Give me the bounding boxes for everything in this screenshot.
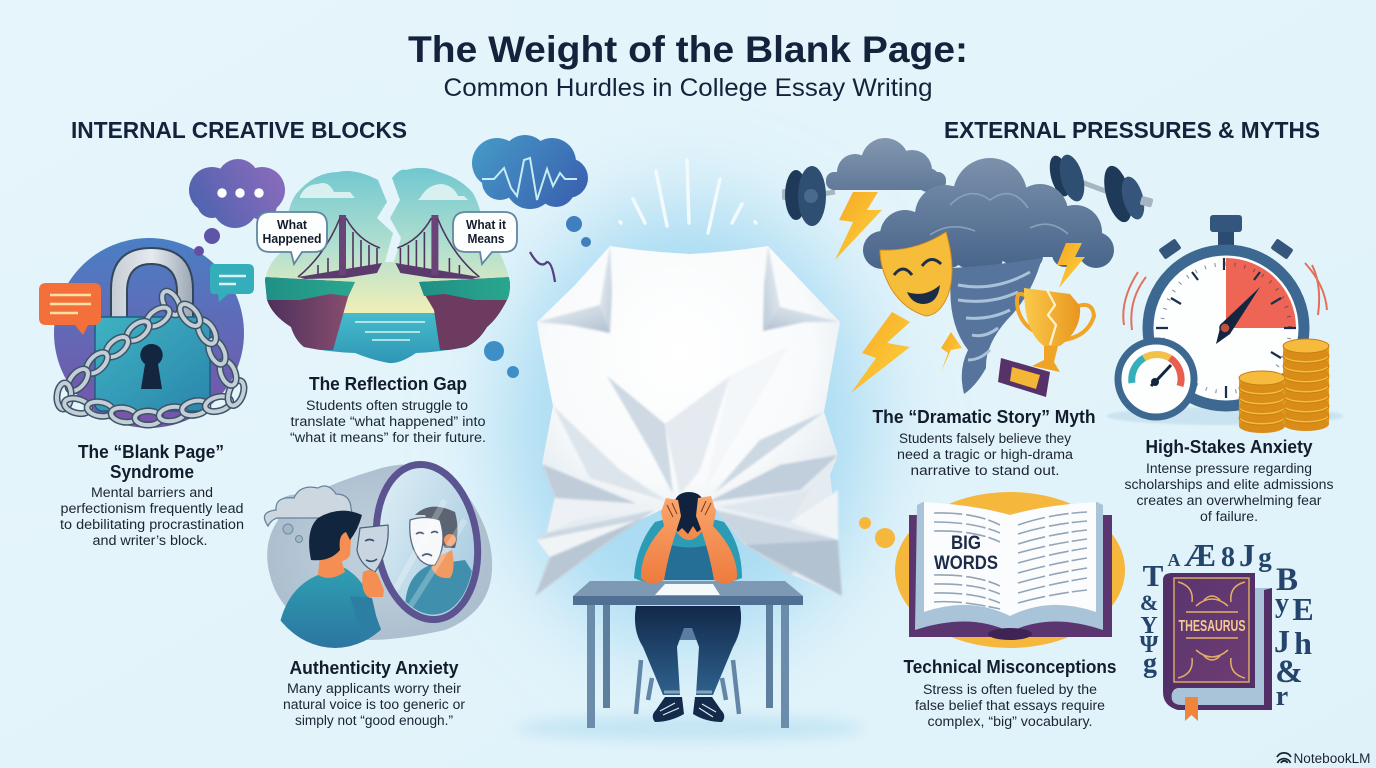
icon: thesaurus book with letters: 8 xyxy=(1221,542,1235,573)
icon: man with mask at mirror xyxy=(264,458,492,660)
icon: thesaurus book with letters: & xyxy=(1140,590,1158,615)
icon: open book with big words: BIG xyxy=(951,533,981,554)
icon: tornado xyxy=(950,258,1042,394)
body: technical misconceptions xyxy=(915,682,1105,729)
body: reflection gap: translate “what happened” into xyxy=(290,414,486,429)
body: dramatic story xyxy=(897,431,1074,478)
icon: thesaurus book with letters: h xyxy=(1294,625,1312,661)
icon: thesaurus book with letters: r xyxy=(1276,681,1288,712)
icon: chained padlock xyxy=(54,238,247,428)
central figure: student under giant blank page xyxy=(535,160,842,728)
icon: open book with big words: WORDS xyxy=(934,553,998,574)
heading: blank page: The “Blank Page” xyxy=(78,442,224,462)
chair xyxy=(636,628,739,714)
callout: what it means xyxy=(453,212,517,264)
body: high-stakes anxiety: Intense pressure regarding xyxy=(1146,461,1312,476)
body: dramatic story: narrative to stand out. xyxy=(910,463,1060,478)
panel: authenticity anxiety xyxy=(264,458,492,728)
body: high-stakes anxiety: of failure. xyxy=(1200,509,1258,524)
body: reflection gap xyxy=(290,398,486,445)
title: The Weight of the Blank Page: xyxy=(408,29,968,70)
icon: stopwatch with gauge and coins xyxy=(1107,215,1343,433)
callout: what it means: What it xyxy=(466,217,507,232)
body: dramatic story: need a tragic or high-drama xyxy=(897,447,1074,462)
icon: blue thought bubble xyxy=(472,135,591,378)
icon: thesaurus book with letters xyxy=(1140,537,1314,721)
brand: NotebookLM: NotebookLM xyxy=(1294,751,1370,766)
icon: cracked trophy xyxy=(998,288,1094,397)
icon: orange speech bubble xyxy=(39,283,101,335)
body: high-stakes anxiety: creates an overwhelming fear xyxy=(1136,493,1322,508)
panel: high-stakes anxiety xyxy=(1107,215,1343,524)
icon: teal speech bubble xyxy=(210,264,254,302)
body: reflection gap: “what it means” for their future. xyxy=(290,430,486,445)
icon: thesaurus book with letters: THESAURUS xyxy=(1178,618,1246,635)
body: dramatic story: Students falsely believe they xyxy=(899,431,1071,446)
panel: blank page syndrome xyxy=(39,159,285,548)
callout: what happened: Happened xyxy=(262,231,322,246)
icon: thesaurus book with letters: Æ xyxy=(1184,537,1216,573)
icon: comedy mask xyxy=(880,232,952,316)
icon: thesaurus book with letters: J xyxy=(1239,537,1255,573)
body: technical misconceptions: complex, “big” vocabulary. xyxy=(928,714,1092,729)
icon: thesaurus book with letters: T xyxy=(1143,558,1164,593)
callout: what it means: Means xyxy=(468,231,504,246)
body: blank page: perfectionism frequently lead xyxy=(60,501,244,516)
shoes xyxy=(653,697,724,722)
body: high-stakes anxiety: scholarships and elite admissions xyxy=(1124,477,1334,492)
icon: lightning bolts xyxy=(835,192,1085,393)
icon: purple thought bubble xyxy=(189,159,285,256)
body: authenticity anxiety xyxy=(283,681,466,728)
body: authenticity anxiety: Many applicants worry their xyxy=(287,681,462,696)
body: technical misconceptions: Stress is often fueled by the xyxy=(923,682,1097,697)
body: reflection gap: Students often struggle to xyxy=(306,398,468,413)
panel: technical misconceptions xyxy=(859,492,1314,729)
callout: what happened: What xyxy=(277,217,308,232)
subtitle: Common Hurdles in College Essay Writing xyxy=(444,74,932,102)
body: blank page xyxy=(60,485,244,548)
body: high-stakes anxiety xyxy=(1124,461,1334,524)
heading: dramatic story: The “Dramatic Story” Myth xyxy=(872,407,1096,427)
student torso and arms xyxy=(634,492,742,584)
icon: thesaurus book with letters: Y xyxy=(1140,613,1158,639)
heading: authenticity anxiety: Authenticity Anxiety xyxy=(290,658,458,678)
title xyxy=(408,29,968,102)
desk xyxy=(573,581,803,728)
radiating marks xyxy=(620,160,756,233)
callout: what happened xyxy=(257,212,327,264)
icon: thesaurus book with letters: E xyxy=(1292,591,1314,627)
heading: technical misconceptions: Technical Misconceptions xyxy=(904,657,1116,677)
heading: high-stakes anxiety: High-Stakes Anxiety xyxy=(1146,437,1312,457)
body: technical misconceptions: false belief that essays require xyxy=(915,698,1105,713)
heading: internal creative blocks: INTERNAL CREATIVE BLOCKS xyxy=(71,117,407,143)
icon: thesaurus book with letters: y xyxy=(1275,588,1289,619)
body: blank page: Mental barriers and xyxy=(91,485,213,500)
heading: syndrome: Syndrome xyxy=(110,462,194,482)
icon: thesaurus book with letters: B xyxy=(1276,562,1298,598)
body: authenticity anxiety: simply not “good enough.” xyxy=(295,713,453,728)
body: blank page: and writer’s block. xyxy=(92,533,208,548)
panel: reflection gap xyxy=(255,135,591,445)
icon: dumbbell and storm xyxy=(782,138,1154,397)
icon: thesaurus book with letters: & xyxy=(1275,654,1303,690)
icon: thesaurus book with letters: A xyxy=(1168,550,1180,570)
heading: reflection gap: The Reflection Gap xyxy=(309,374,467,394)
icon: broken bridge scene xyxy=(255,165,517,368)
body: blank page: to debilitating procrastination xyxy=(60,517,244,532)
legs xyxy=(635,606,741,695)
panel: dramatic story myth xyxy=(782,138,1154,478)
body: authenticity anxiety: natural voice is too generic or xyxy=(283,697,466,712)
icon: thesaurus book with letters: g xyxy=(1258,542,1272,572)
icon: thesaurus book with letters: Ψ xyxy=(1140,632,1159,658)
icon: thesaurus book with letters: g xyxy=(1143,648,1157,679)
icon: thesaurus book with letters: J xyxy=(1274,623,1290,659)
icon: open book with big words xyxy=(859,492,1125,648)
heading: external pressures and myths: EXTERNAL PRESSURES & MYTHS xyxy=(944,117,1320,143)
blank crumpled page xyxy=(535,246,842,596)
